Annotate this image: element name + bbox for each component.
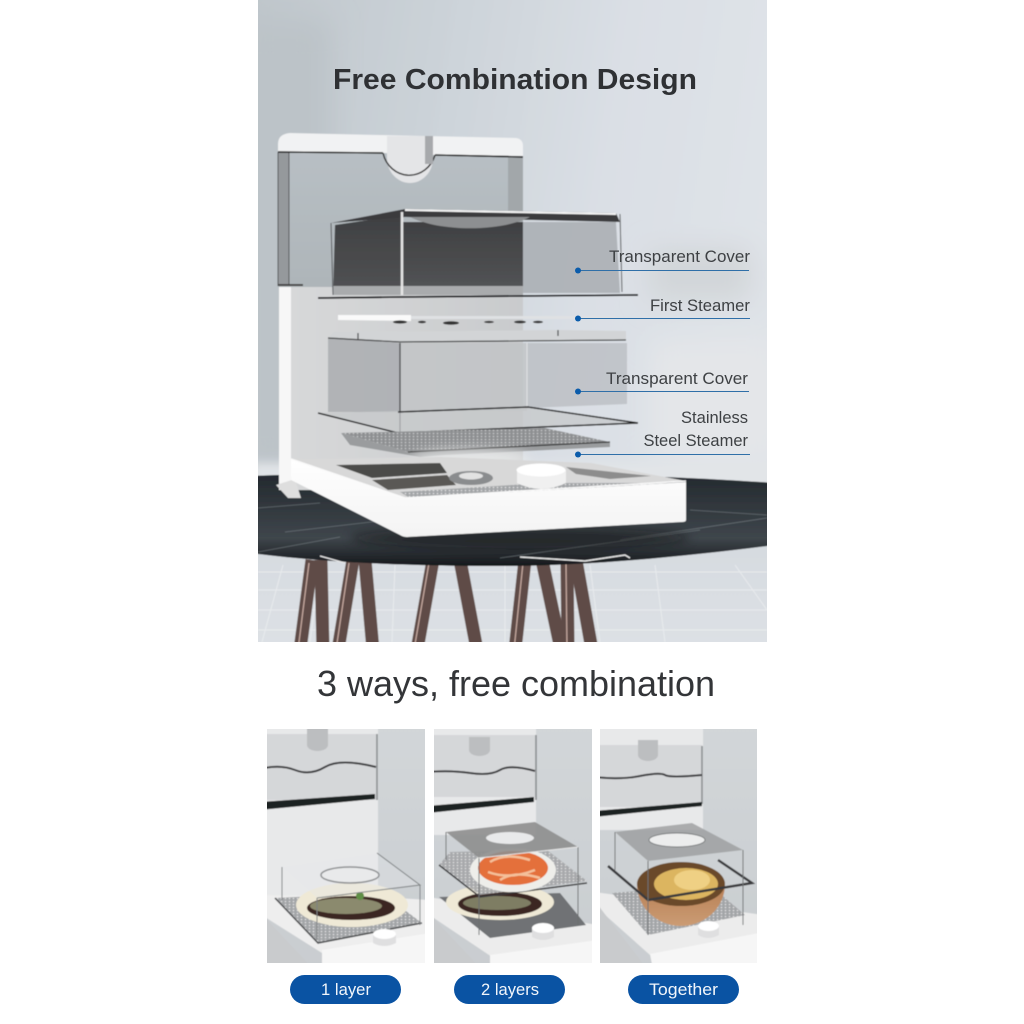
button: together: Together bbox=[649, 981, 719, 999]
shadow under base bbox=[350, 528, 690, 548]
title: Free Combination Design bbox=[333, 64, 697, 96]
bowl of food bbox=[637, 862, 725, 926]
base bbox=[434, 892, 592, 963]
tank lid with handle bbox=[278, 133, 523, 183]
table legs bbox=[298, 560, 592, 650]
steamer base bbox=[291, 457, 686, 537]
knob bbox=[373, 929, 396, 946]
kitchen background bbox=[258, 0, 767, 484]
tiled floor bbox=[258, 546, 767, 642]
base bbox=[267, 896, 425, 963]
lower plate with fish bbox=[446, 884, 554, 920]
button: 2 layers bbox=[454, 975, 565, 1004]
knob bbox=[698, 921, 719, 938]
transparent cover bbox=[446, 822, 578, 935]
water tank bbox=[278, 152, 523, 287]
transparent cover bbox=[615, 823, 743, 935]
callout: transparent cover upper: Transparent Cover bbox=[609, 248, 751, 266]
button: 1 layer bbox=[290, 975, 401, 1004]
callout: transparent cover upper bbox=[575, 248, 751, 274]
base bbox=[600, 890, 757, 963]
plate with shrimp bbox=[470, 848, 556, 892]
lower transparent cover bbox=[318, 330, 638, 433]
panel: 1 layer photo bbox=[267, 729, 425, 963]
marble table top bbox=[250, 473, 775, 566]
button: 2 layers: 2 layers bbox=[481, 981, 539, 999]
subheading: 3 ways, free combination bbox=[317, 663, 715, 704]
callout: transparent cover lower: Transparent Cover bbox=[606, 370, 749, 388]
panel: main product scene bbox=[240, 0, 780, 650]
plate with fish bbox=[296, 883, 408, 927]
callout: first steamer bbox=[575, 297, 750, 322]
transparent cover bbox=[282, 853, 420, 940]
water tank with water line bbox=[594, 725, 703, 830]
steamer back panel bbox=[276, 285, 523, 498]
stainless steel steamer bbox=[341, 427, 610, 460]
control knob bbox=[516, 464, 566, 489]
first steamer tray bbox=[338, 314, 544, 326]
button: 1 layer: 1 layer bbox=[321, 981, 372, 999]
callout: stainless steel steamer: Steel Steamer bbox=[643, 432, 748, 450]
panel: 2 layers photo bbox=[434, 729, 592, 963]
callout: transparent cover lower bbox=[575, 370, 749, 394]
ring tray bbox=[608, 860, 752, 900]
callout: first steamer: First Steamer bbox=[650, 297, 750, 315]
panel: together photo bbox=[600, 729, 757, 963]
callout: stainless steel steamer: Stainless bbox=[681, 409, 748, 427]
middle tray bbox=[439, 850, 587, 897]
upper transparent cover bbox=[318, 209, 638, 298]
knob bbox=[532, 923, 554, 940]
callout: stainless steel steamer bbox=[575, 409, 750, 458]
button: together bbox=[628, 975, 739, 1004]
water tank with water line bbox=[428, 725, 536, 835]
water tank with water line bbox=[260, 725, 378, 900]
